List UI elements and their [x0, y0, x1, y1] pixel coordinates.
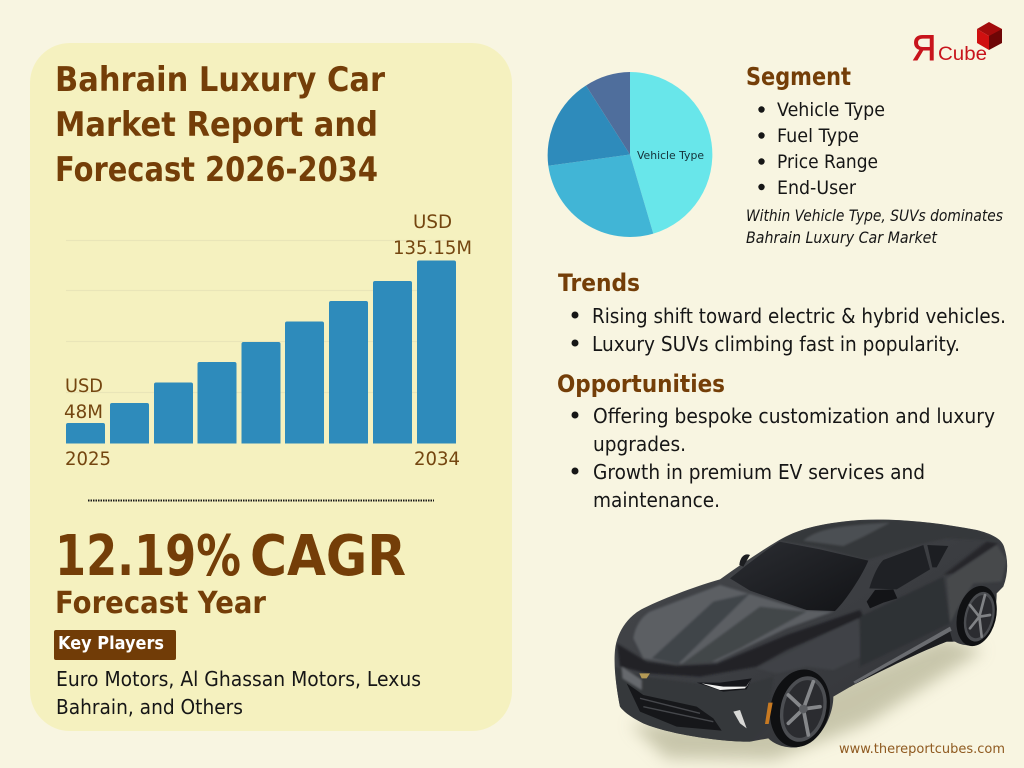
CAGR figure: 12.19%: [55, 524, 241, 589]
logo: [912, 22, 1002, 68]
end value label: USD: [413, 211, 452, 233]
year labels: 2025: [65, 448, 111, 470]
end value label: [393, 211, 472, 259]
key players list: [56, 667, 421, 719]
trends list: [572, 304, 1006, 356]
opportunities list: maintenance.: [593, 488, 720, 512]
key players list: Bahrain, and Others: [56, 695, 243, 719]
key players list: Euro Motors, Al Ghassan Motors, Lexus: [56, 667, 421, 691]
key players badge: [54, 630, 176, 660]
start value label: 48M: [64, 401, 103, 423]
front fascia: [615, 667, 773, 743]
front wheel: [762, 663, 838, 754]
sill highlight: [853, 627, 952, 686]
start value label: USD: [65, 375, 103, 397]
windshield: [730, 542, 868, 611]
rear wheel: [950, 582, 1003, 650]
roof: [778, 520, 1000, 560]
trends list: Luxury SUVs climbing fast in popularity.: [592, 332, 960, 356]
badge: [639, 673, 650, 678]
car body: [615, 520, 1007, 747]
segment list: Fuel Type: [777, 125, 859, 147]
panel: market summary: [30, 43, 512, 731]
body shading: [615, 520, 1007, 743]
website url: www.thereportcubes.com: [839, 742, 1005, 757]
segment list: [758, 99, 885, 199]
bars: [66, 260, 456, 444]
door: [860, 577, 950, 667]
logo: Cube: [938, 44, 987, 65]
segment list: Vehicle Type: [777, 99, 885, 121]
logo: Я: [912, 29, 936, 68]
ground shadow: [630, 637, 983, 760]
segment note: [746, 206, 1003, 247]
CAGR figure: [55, 524, 406, 589]
opportunities list: upgrades.: [593, 432, 686, 456]
pie chart: [548, 72, 712, 237]
logo cube: [977, 22, 1002, 50]
grille: [627, 683, 722, 731]
segment note: Bahrain Luxury Car Market: [746, 228, 938, 247]
headlight: [697, 678, 752, 692]
hood panels: [633, 585, 833, 664]
fog light: [733, 710, 747, 728]
mirror: [867, 589, 897, 608]
year labels: [65, 448, 460, 470]
bar chart: [64, 211, 472, 470]
title: Bahrain Luxury Car: [55, 60, 385, 100]
year labels: 2034: [414, 448, 460, 470]
CAGR figure: CAGR: [250, 524, 406, 589]
rear quarter: [947, 545, 1007, 623]
opportunities heading: Opportunities: [557, 370, 725, 398]
title: Market Report and: [55, 105, 378, 145]
opportunities list: Growth in premium EV services and: [593, 460, 925, 484]
segment list: End-User: [777, 177, 856, 199]
trends heading: Trends: [558, 269, 640, 297]
title: Forecast 2026-2034: [55, 150, 378, 190]
opportunities list: [572, 404, 995, 512]
pie chart: Vehicle Type: [637, 149, 704, 162]
side windows: [869, 545, 930, 589]
start value label: [64, 375, 103, 423]
fender: [794, 618, 859, 668]
car illustration: [615, 520, 1007, 760]
title: [55, 60, 385, 190]
marker light: [765, 703, 773, 724]
key players badge: Key Players: [58, 633, 164, 654]
hood crease: [617, 610, 863, 677]
segment list: Price Range: [777, 151, 878, 173]
end value label: 135.15M: [393, 237, 472, 259]
forecast year label: Forecast Year: [55, 586, 266, 621]
panel background: [30, 43, 512, 731]
opportunities list: Offering bespoke customization and luxury: [593, 404, 995, 428]
segment heading: Segment: [746, 62, 851, 91]
